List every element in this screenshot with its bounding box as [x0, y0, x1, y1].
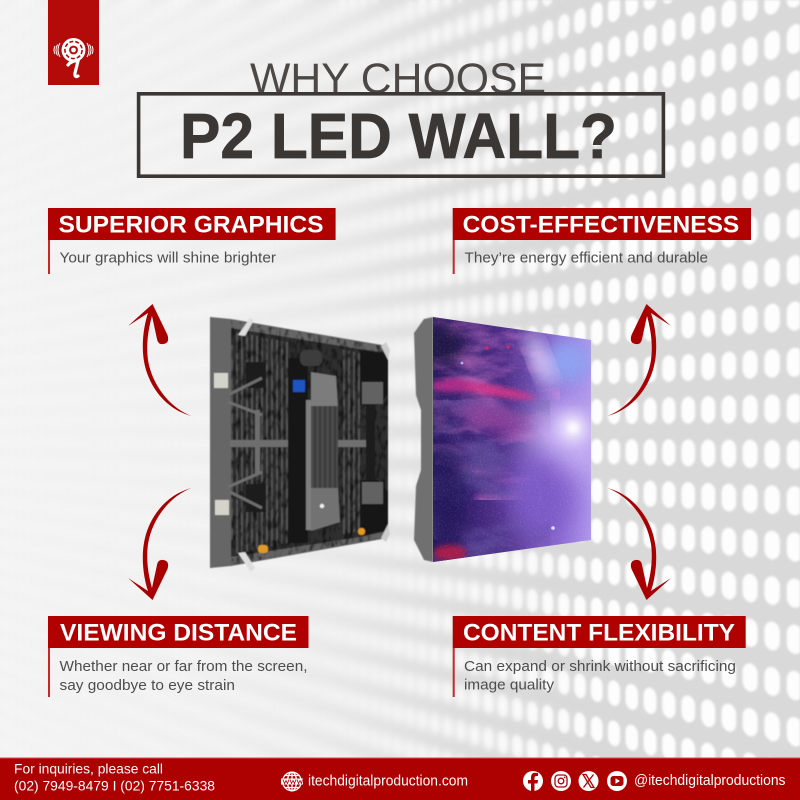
panel: content flexibility: CONTENT FLEXIBILITY — [463, 620, 735, 647]
footer: social handle: @itechdigitalproductions — [634, 773, 786, 789]
panel: content flexibility: Can expand or shrink without sacrificing — [464, 658, 736, 675]
icon: facebook — [523, 771, 543, 791]
LED panel: rear view — [210, 317, 391, 572]
footer: phone enquiries: (02) 7949-8479 I (02) 7751-6338 — [14, 778, 215, 794]
arrow: up-left — [128, 304, 192, 416]
panel: cost-effectiveness: COST-EFFECTIVENESS — [463, 212, 739, 238]
footer: website: itechdigitalproduction.com — [308, 772, 468, 790]
arrow: up-right — [608, 304, 671, 416]
panel: viewing distance: Whether near or far from the screen, — [60, 658, 308, 675]
icon: youtube — [607, 771, 627, 791]
panel: superior graphics: Your graphics will shine brighter — [60, 250, 276, 266]
icon: instagram — [551, 771, 571, 791]
panel: superior graphics — [48, 208, 336, 274]
LED panel: front view — [414, 310, 599, 570]
footer: phone enquiries — [14, 760, 215, 794]
footer: phone enquiries: For inquiries, please call — [14, 760, 163, 776]
panel: content flexibility: image quality — [464, 676, 554, 694]
icon: website globe — [281, 772, 303, 791]
panel: cost-effectiveness: They’re energy efficient and durable — [464, 250, 708, 266]
panel: viewing distance: VIEWING DISTANCE — [60, 620, 297, 647]
title: P2 LED WALL: P2 LED WALL? — [180, 100, 617, 172]
arrow: down-right — [608, 488, 671, 600]
icon: logo emblem — [54, 38, 93, 77]
logo badge — [48, 0, 99, 85]
nebula screen — [433, 317, 591, 562]
arrow: down-left — [128, 488, 192, 600]
panel: viewing distance: say goodbye to eye strain — [60, 677, 235, 694]
panel: cost-effectiveness — [453, 208, 751, 274]
icon: x — [578, 771, 598, 791]
panel: viewing distance — [48, 616, 308, 697]
panel side frame — [414, 317, 433, 562]
panel: content flexibility — [453, 616, 746, 697]
panel: superior graphics: SUPERIOR GRAPHICS — [58, 212, 324, 238]
title: why choose: WHY CHOOSE — [250, 55, 546, 103]
title frame — [139, 94, 663, 176]
footer bar — [0, 758, 800, 800]
